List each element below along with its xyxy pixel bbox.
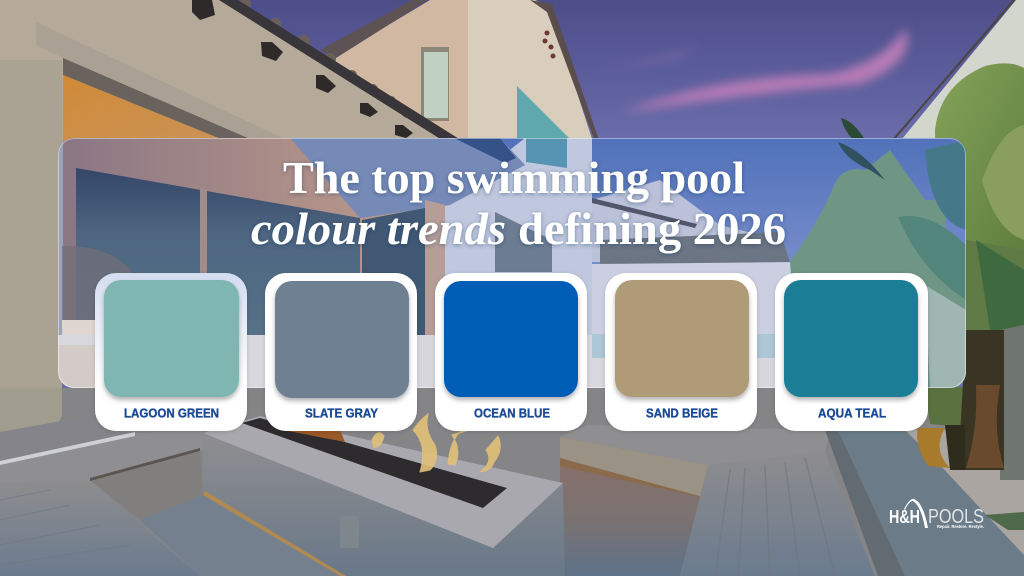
logo: H&H Pools (889, 499, 984, 529)
logo: H&H Pools: H&H (889, 507, 920, 527)
logo: H&H Pools: POOLS (928, 506, 984, 528)
white side wall and banana leaves (841, 0, 1024, 530)
ground, deck and floor (0, 388, 1024, 576)
roof tiles (239, 0, 466, 152)
title (251, 152, 786, 254)
colour card: Slate Gray: SLATE GRAY (305, 406, 379, 420)
panel photo view: sky side (58, 138, 966, 388)
panel photo view: neighbouring house and courtyard (58, 180, 966, 388)
roof brackets (192, 0, 441, 154)
colour card: Aqua Teal: AQUA TEAL (818, 406, 886, 420)
colour card: Ocean Blue (435, 273, 587, 431)
colour card: Lagoon Green (95, 273, 247, 431)
colour card: Aqua Teal (775, 273, 928, 431)
pink sunset cloud (590, 28, 907, 112)
panel photo view: house side (58, 138, 592, 335)
fire pit (203, 414, 565, 576)
colour card: Sand Beige: SAND BEIGE (646, 406, 718, 420)
colour card: Ocean Blue: OCEAN BLUE (474, 406, 550, 420)
flames (372, 414, 500, 472)
logo: H&H Pools: Repair. Restore. Restyle. (937, 524, 984, 529)
colour card: Sand Beige (605, 273, 757, 431)
title: The top swimming pool (283, 152, 745, 203)
title line two: year: defining 2026 (518, 203, 786, 254)
panel photo view: banana leaves (790, 140, 966, 388)
upper house walls (320, 0, 599, 160)
egg chair (62, 246, 132, 320)
main beige wall and gutter (0, 0, 496, 420)
colour card: Lagoon Green: LAGOON GREEN (124, 406, 219, 420)
glass panel behind title (58, 138, 966, 388)
colour card: Slate Gray (265, 273, 417, 431)
logo arch (904, 499, 928, 528)
title line two: italic emphasis: colour trends (251, 203, 506, 254)
